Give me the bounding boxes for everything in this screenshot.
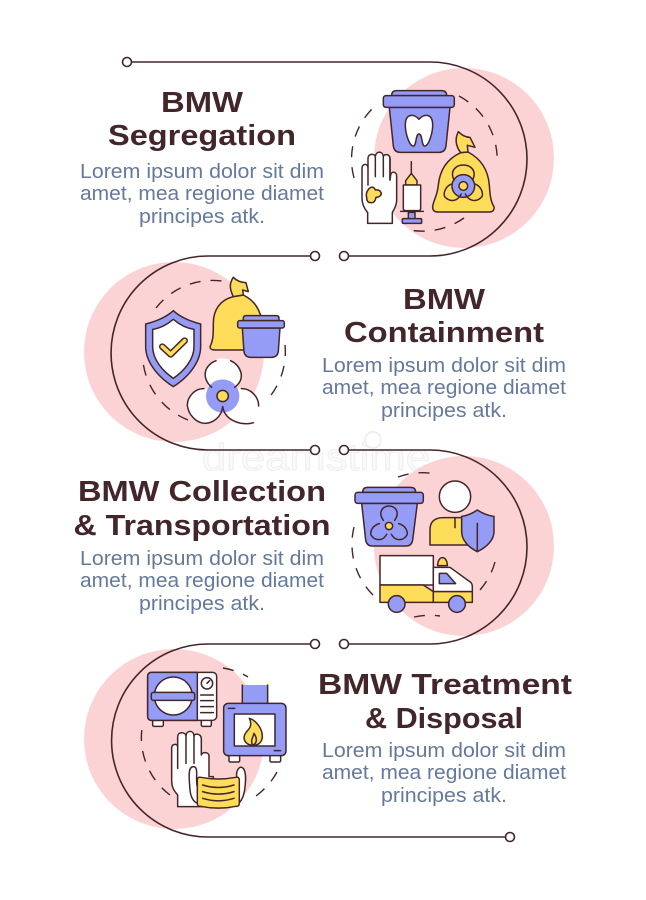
heading: BMW Collection & Transportation: BMW Collection: [78, 476, 326, 508]
icon: tooth bucket: [383, 91, 454, 152]
text block: containment description: [322, 354, 566, 422]
icon: syringe: [401, 162, 423, 223]
icon: shield with check: [146, 311, 201, 387]
icon group: containment: [146, 277, 284, 424]
icon: biohazard symbol: [187, 358, 259, 424]
text block: treatment description: principes atk.: [381, 784, 507, 807]
icon group: collection: [355, 481, 494, 612]
heading: BMW Containment: [344, 284, 544, 349]
icon: container: [238, 316, 284, 357]
text block: collection description: [80, 547, 324, 615]
pink circle backgrounds: [84, 68, 554, 829]
text block: segregation description: amet, mea regione diamet: [80, 182, 324, 205]
icon: glove and face mask: [172, 731, 246, 808]
text block: segregation description: [80, 160, 324, 228]
text block: segregation description: principes atk.: [139, 205, 265, 228]
timeline connector: [111, 58, 527, 842]
dashed rings: [141, 96, 497, 801]
text block: containment description: amet, mea regione diamet: [322, 376, 566, 399]
text block: treatment description: [322, 739, 566, 807]
icon: biohazard bin: [355, 487, 423, 546]
icon: glove with waste: [362, 152, 397, 223]
icon: protected worker: [430, 481, 494, 552]
heading: BMW Containment: Containment: [344, 317, 544, 349]
text block: collection description: amet, mea regione diamet: [80, 569, 324, 592]
icon group: treatment: [148, 672, 286, 808]
watermark: dreamstime: [202, 437, 430, 479]
heading: BMW Segregation: BMW: [161, 87, 244, 119]
icon: waste bag: [210, 277, 262, 350]
heading: BMW Collection & Transportation: [74, 476, 330, 542]
text block: collection description: Lorem ipsum dolor sit dim: [80, 547, 324, 570]
icon: autoclave: [148, 672, 217, 726]
icon: transport truck: [380, 556, 472, 612]
text block: collection description: principes atk.: [139, 592, 265, 615]
text block: containment description: principes atk.: [381, 399, 507, 422]
icon: biohazard bag: [433, 132, 494, 212]
text block: treatment description: Lorem ipsum dolor sit dim: [322, 739, 566, 762]
heading: BMW Collection & Transportation: & Transportation: [74, 510, 330, 542]
heading: BMW Containment: BMW: [403, 284, 486, 316]
heading: BMW Segregation: Segregation: [108, 120, 296, 152]
heading: BMW Treatment & Disposal: & Disposal: [365, 703, 523, 735]
text block: treatment description: amet, mea regione diamet: [322, 761, 566, 784]
heading: BMW Treatment & Disposal: BMW Treatment: [318, 669, 572, 701]
heading: BMW Segregation: [108, 87, 296, 152]
icon group: segregation: [362, 91, 494, 223]
text block: containment description: Lorem ipsum dolor sit dim: [322, 354, 566, 377]
icon: incinerator: [224, 685, 286, 762]
text block: segregation description: Lorem ipsum dolor sit dim: [80, 160, 324, 183]
heading: BMW Treatment & Disposal: [318, 669, 572, 735]
